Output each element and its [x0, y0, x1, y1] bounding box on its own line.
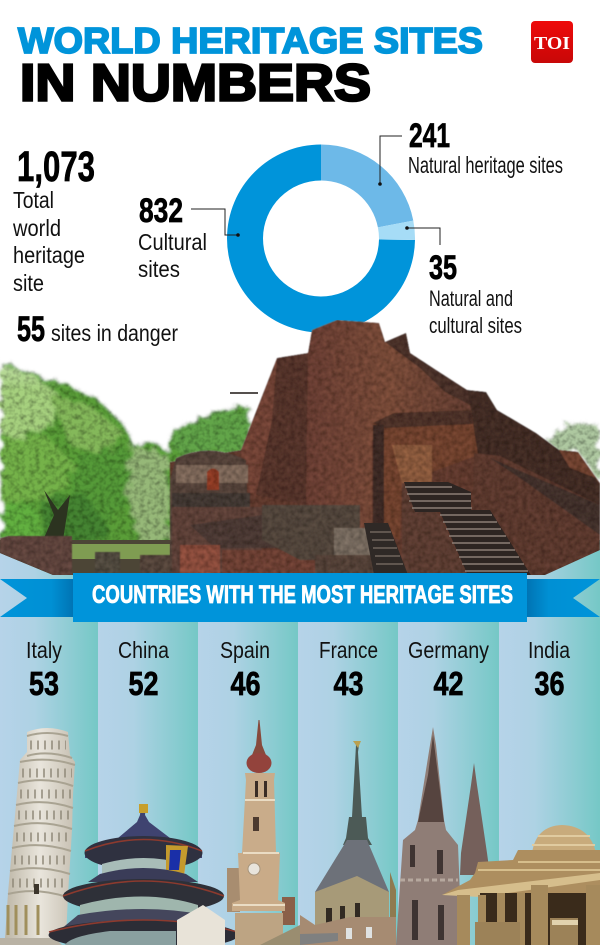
callout: natural heritage sites: 241 [409, 117, 450, 155]
monument: Leaning Tower of Pisa [0, 728, 75, 945]
stat: sites in danger [17, 310, 178, 349]
icon: TOI logo: TOI [534, 33, 570, 53]
building [0, 320, 600, 600]
Italy label [26, 637, 62, 702]
scaffold pole [230, 392, 258, 394]
China label: China [118, 637, 169, 663]
Spain label [220, 637, 270, 702]
stairs [364, 482, 534, 580]
stat: total sites: world [12, 215, 61, 241]
tree trunk [44, 490, 70, 540]
monument: La Seo tower [177, 720, 300, 945]
icon: TOI logo [531, 21, 573, 63]
callout: cultural sites [138, 192, 240, 282]
monument: Modhera Sun Temple [442, 825, 600, 945]
photo: Nalanda ruins [0, 320, 600, 600]
title: WORLD HERITAGE SITES [18, 20, 483, 61]
trees [0, 360, 600, 575]
ground [0, 540, 170, 575]
title: IN NUMBERS [20, 54, 371, 112]
India label: India [528, 637, 570, 663]
stat: total sites [12, 143, 95, 296]
India label: 36 [534, 665, 564, 702]
donut chart [227, 144, 415, 333]
callout: cultural sites: 832 [139, 192, 183, 230]
Germany label: 42 [434, 665, 464, 702]
Italy label: Italy [26, 637, 62, 663]
country columns background [0, 540, 600, 945]
stat: total sites: 1,073 [17, 143, 95, 191]
France label [319, 637, 378, 702]
Germany label: Germany [408, 637, 489, 663]
stat: total sites: site [13, 270, 44, 296]
callout: natural heritage sites [378, 117, 563, 186]
title [18, 20, 483, 112]
monument: Mont Saint-Michel spire [300, 741, 396, 945]
stat: sites in danger: sites in danger [51, 320, 178, 346]
grass bank [70, 544, 170, 559]
China label: 52 [128, 665, 158, 702]
Spain label: 46 [230, 665, 260, 702]
ribbon banner [0, 573, 600, 622]
Spain label: Spain [220, 637, 270, 663]
India label [528, 637, 570, 702]
China label [118, 637, 169, 702]
Germany label [408, 637, 489, 702]
stat: total sites: Total [13, 187, 54, 213]
France label: France [319, 637, 378, 663]
callout: cultural sites: Cultural [138, 229, 207, 255]
sky haze on treetops [0, 362, 68, 386]
stat: sites in danger: 55 [17, 310, 45, 349]
callout: cultural sites: sites [138, 256, 180, 282]
France label: 43 [334, 665, 364, 702]
stat: total sites: heritage [13, 242, 85, 268]
callout: natural and cultural sites: 35 [429, 249, 457, 287]
callout: natural and cultural sites: cultural sites [429, 313, 522, 338]
Italy label: 53 [29, 665, 59, 702]
monument: Temple of Heaven [48, 804, 238, 945]
callout: natural and cultural sites: Natural and [429, 286, 513, 311]
callout: natural and cultural sites [405, 226, 522, 338]
monument: Cologne Cathedral [396, 727, 490, 945]
